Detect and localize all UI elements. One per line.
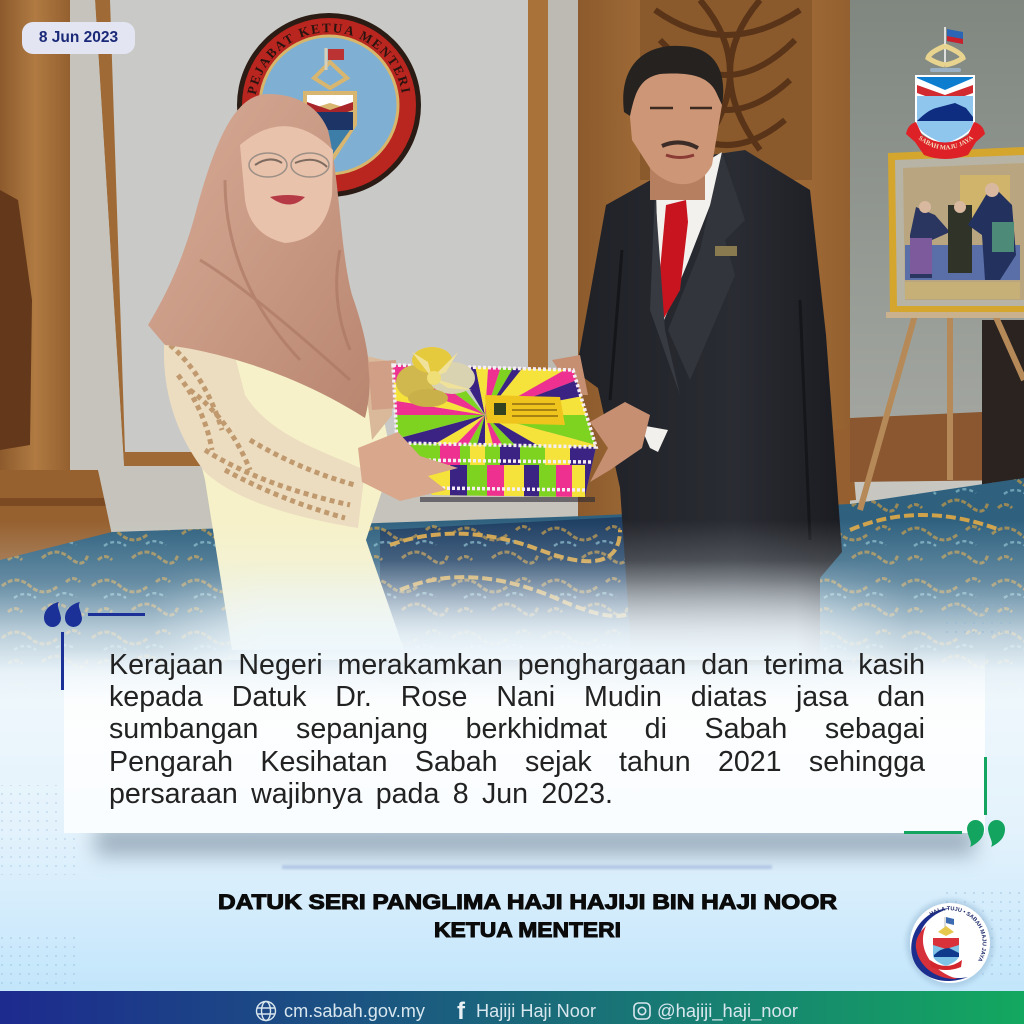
signatory name: KETUA MENTERI bbox=[434, 919, 621, 942]
woman hands bbox=[358, 432, 458, 501]
emblem: Sabah coat of arms: SABAH MAJU JAYA bbox=[918, 136, 974, 150]
date badge: 8 Jun 2023 bbox=[39, 29, 118, 46]
wall crest: Pejabat Ketua Menteri: PEJABAT KETUA MENTERI bbox=[247, 24, 410, 95]
quote text bbox=[109, 649, 926, 810]
date badge bbox=[22, 22, 135, 54]
footer bar bbox=[0, 991, 1024, 1024]
carpet bbox=[0, 478, 1024, 730]
dot pattern accents bbox=[0, 600, 1020, 990]
website: cm.sabah.gov.my bbox=[284, 1001, 425, 1021]
icon: globe bbox=[256, 1002, 276, 1020]
quote text: Kerajaan Negeri merakamkan penghargaan dan terima kasih bbox=[109, 649, 925, 681]
quote card shadow bbox=[95, 826, 975, 856]
quote text: kepada Datuk Dr. Rose Nani Mudin diatas jasa dan bbox=[109, 681, 925, 713]
quote card bbox=[64, 650, 985, 833]
quote text: Pengarah Kesihatan Sabah sejak tahun 2021 sehingga bbox=[109, 746, 925, 778]
emblem: Sabah coat of arms bbox=[906, 27, 985, 159]
wall crest: Pejabat Ketua Menteri bbox=[237, 13, 421, 196]
seal: Hala Tuju Sabah Maju Jaya bbox=[905, 898, 995, 988]
man receiver: Chief Minister bbox=[552, 46, 842, 665]
quote text: persaraan wajibnya pada 8 Jun 2023. bbox=[109, 778, 613, 810]
facebook name: Hajiji Haji Noor bbox=[476, 1001, 596, 1021]
fade over figures bbox=[171, 565, 889, 660]
gift box bbox=[358, 347, 650, 502]
signatory name bbox=[218, 891, 837, 942]
man hand bbox=[590, 402, 650, 482]
painting on easel bbox=[860, 147, 1024, 510]
icon: instagram bbox=[634, 1003, 650, 1019]
woman presenter bbox=[148, 94, 404, 650]
icon: ribbon bow bbox=[396, 347, 475, 407]
background fade panel bbox=[0, 520, 1024, 1024]
opening quote mark bbox=[44, 602, 145, 690]
room background bbox=[0, 0, 1024, 730]
seal: Hala Tuju Sabah Maju Jaya: HALA TUJU • SABAH MAJU JAYA bbox=[929, 906, 986, 961]
divider bbox=[282, 865, 772, 869]
quote text: sumbangan sepanjang berkhidmat di Sabah sebagai bbox=[109, 713, 925, 745]
instagram handle: @hajiji_haji_noor bbox=[657, 1001, 798, 1022]
signatory name: DATUK SERI PANGLIMA HAJI HAJIJI BIN HAJI NOOR bbox=[218, 891, 837, 914]
closing quote mark bbox=[904, 757, 1005, 847]
